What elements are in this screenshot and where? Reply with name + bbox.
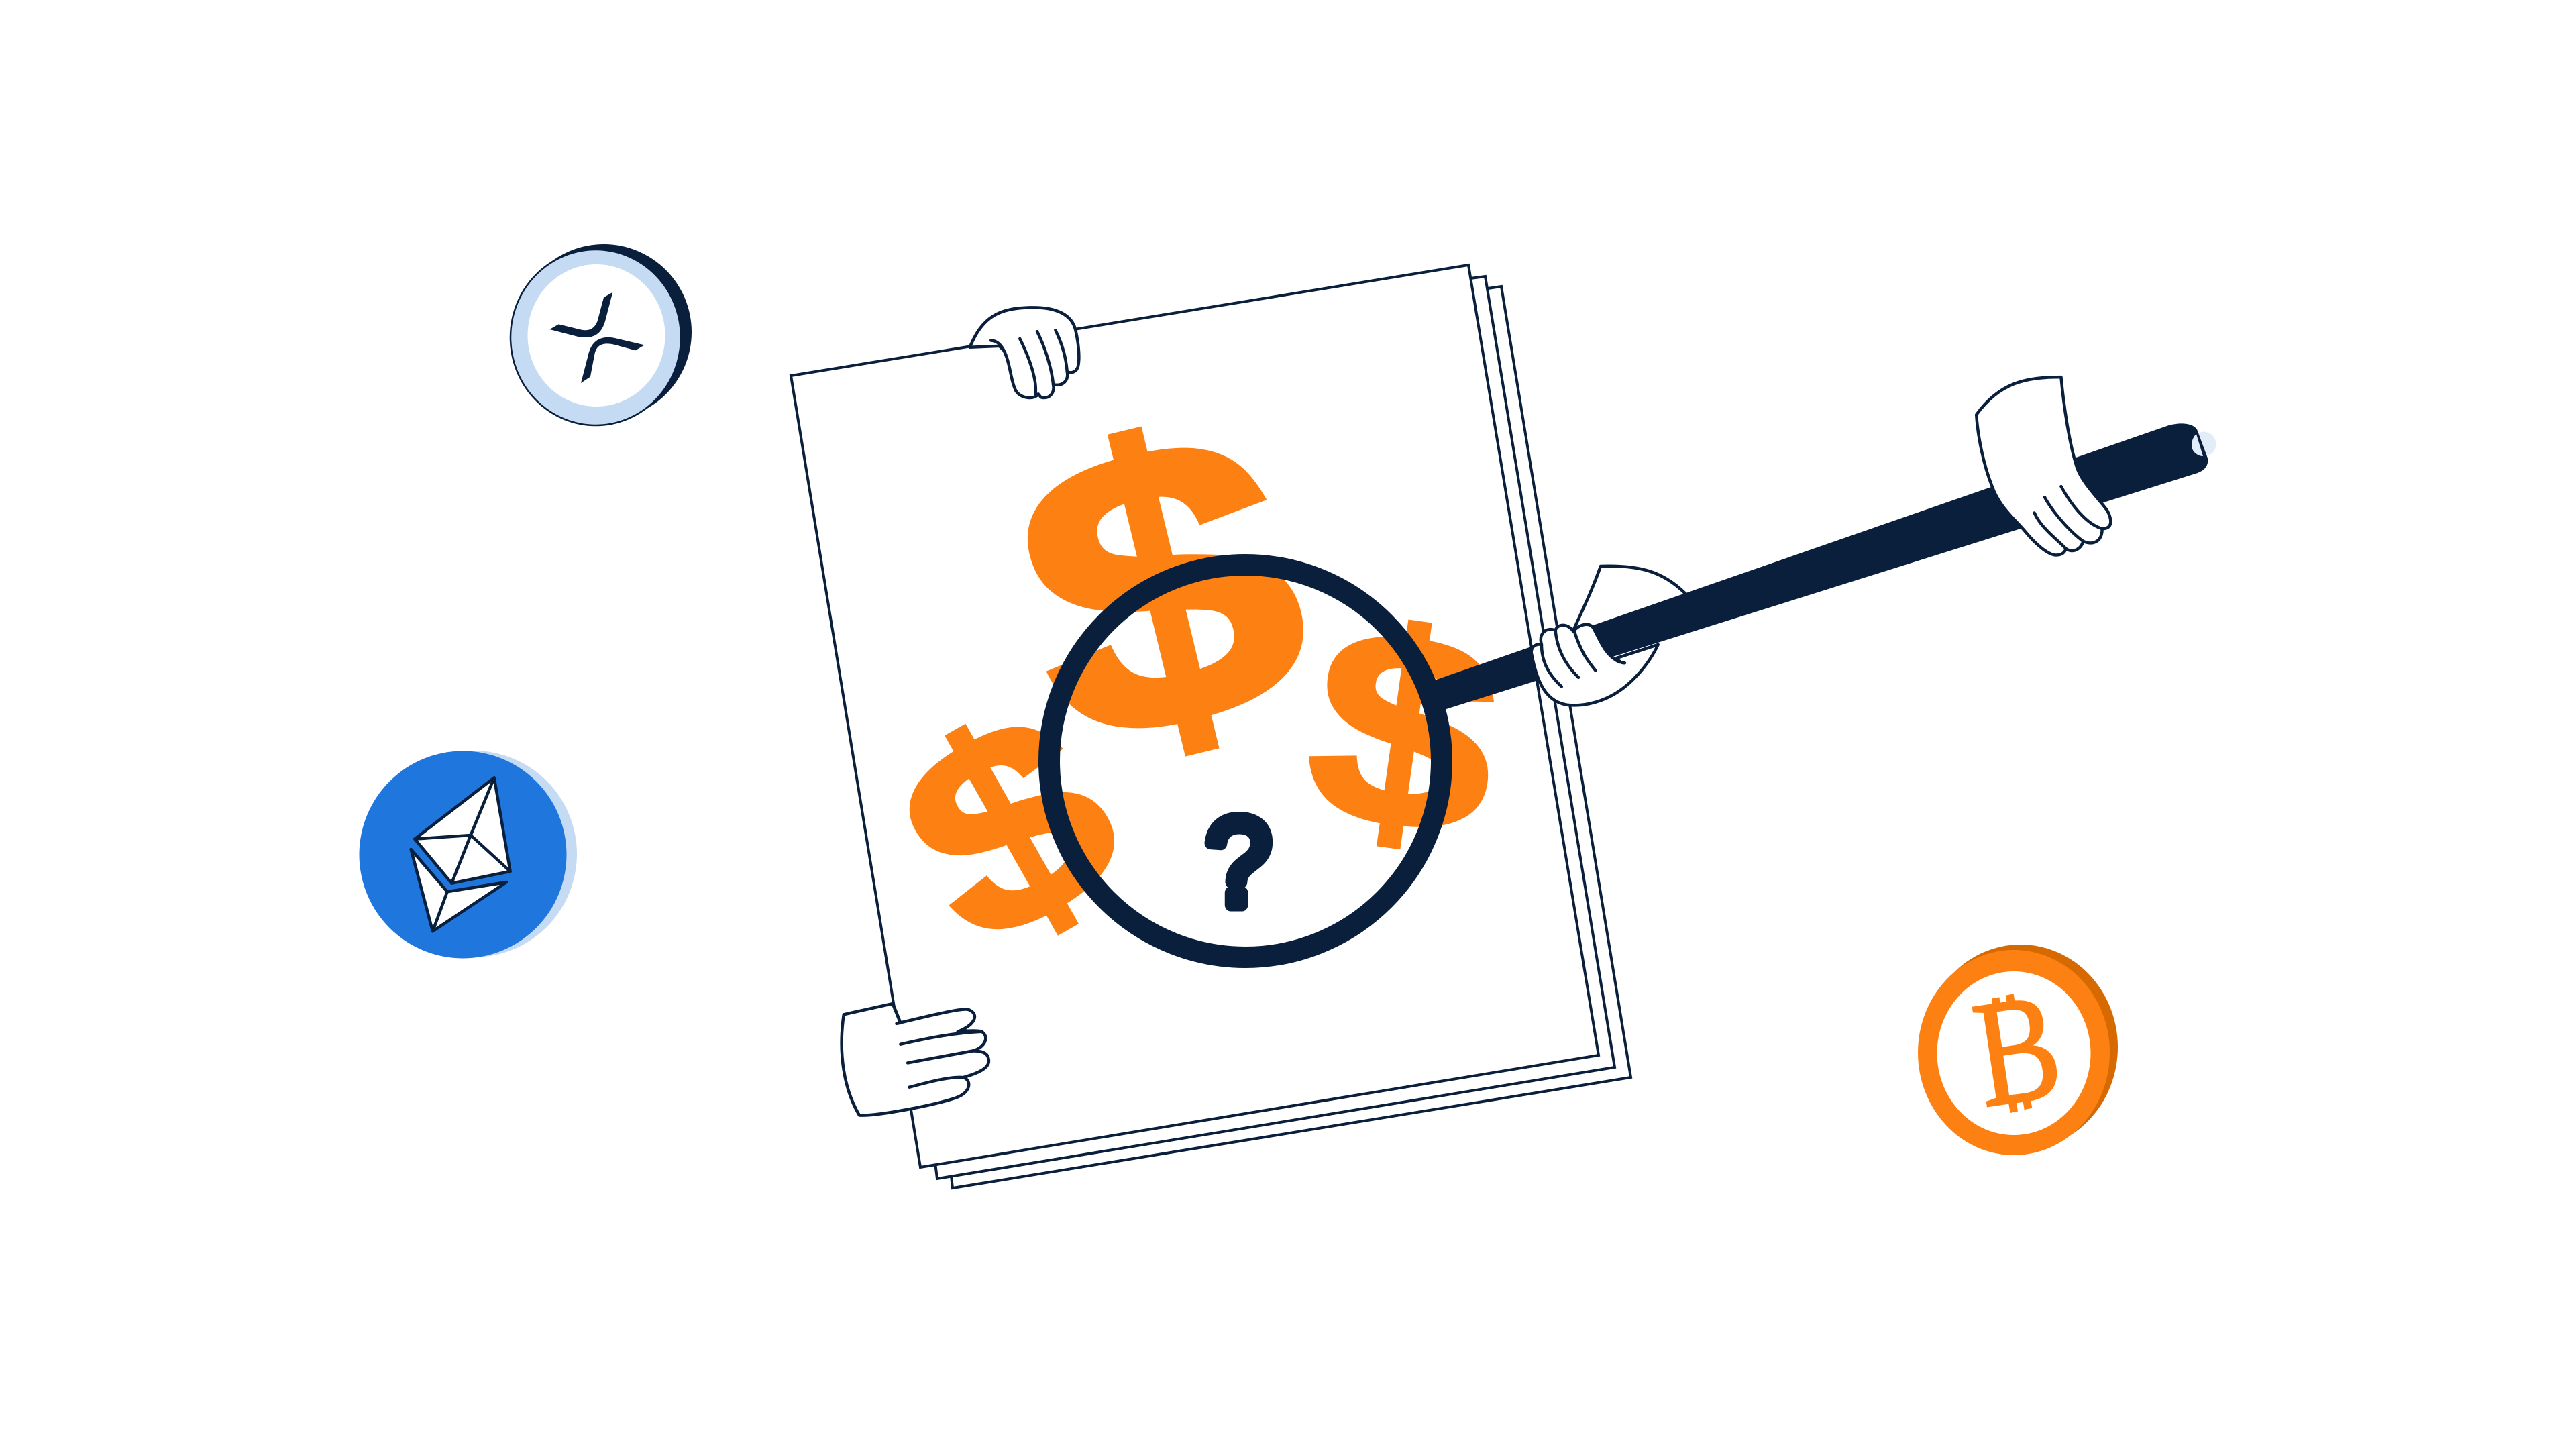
icon: question mark: ?: [1205, 793, 1271, 932]
icon: Ethereum coin: [360, 751, 577, 958]
icon: magnifying glass: [1049, 423, 2216, 957]
icon: right dollar sign: $: [1292, 568, 1515, 896]
icon: hand gripping magnifier handle: [1532, 625, 1658, 705]
icon: hand holding bottom left of page: [842, 1004, 989, 1116]
icon: hand holding top of page: [970, 307, 1079, 398]
icon: Bitcoin coin: [1918, 945, 2118, 1155]
icon: hand holding end of magnifier handle: [1976, 377, 2110, 555]
icon: left dollar sign: $: [854, 648, 1165, 1006]
icon: Bitcoin coin: B: [1964, 961, 2071, 1139]
icon: large dollar sign: $: [981, 341, 1342, 833]
icon: back of hand behind magnifier handle: [1573, 566, 1685, 641]
panel: stacked document pages: [791, 265, 1631, 1188]
icon: XRP coin: [511, 244, 692, 425]
